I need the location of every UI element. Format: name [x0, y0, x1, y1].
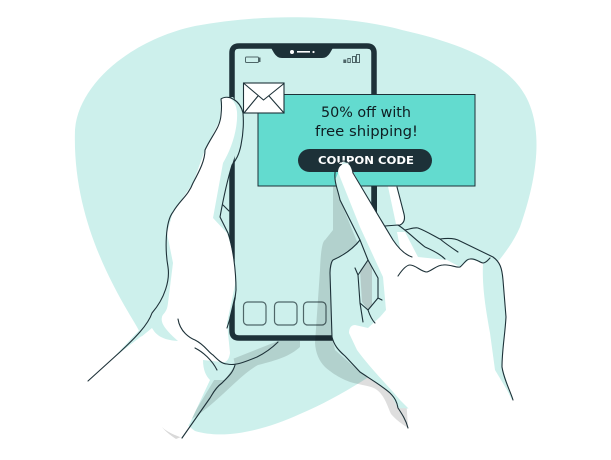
right hand finger outlines: [353, 173, 412, 257]
coupon headline: free shipping!: [315, 124, 418, 140]
right hand: [330, 161, 513, 440]
phone: [232, 46, 374, 338]
phone notch: [270, 46, 334, 58]
right hand white fill: [338, 164, 513, 440]
coupon headline: [315, 105, 418, 140]
battery icon: [246, 57, 260, 62]
right hand teal shading: [330, 162, 513, 410]
left hand wrist shadow: [162, 427, 181, 439]
gap between fingers showing shadowed area: [360, 260, 372, 310]
second finger behind card: [385, 186, 404, 226]
shadow under phone: [190, 341, 300, 420]
background blob: [75, 17, 536, 434]
left hand: [88, 97, 278, 438]
camera and speaker: [290, 50, 315, 54]
left hand white fill: [90, 97, 237, 437]
coupon button: COUPON CODE: [318, 155, 414, 167]
left hand outlines: [88, 97, 243, 381]
app icons: [244, 302, 326, 325]
coupon card: [258, 94, 475, 186]
left hand teal shading: [168, 97, 243, 380]
shadow of right hand: [315, 170, 408, 428]
coupon button: [298, 149, 432, 172]
teal sliver under wrist line: [113, 322, 152, 358]
icon: envelope: [244, 83, 284, 113]
coupon headline: 50% off with: [321, 105, 411, 121]
signal icon: [344, 54, 360, 62]
phone edge seen through fingers: [372, 186, 377, 300]
phone body: [232, 46, 374, 338]
card panel: [258, 94, 475, 186]
